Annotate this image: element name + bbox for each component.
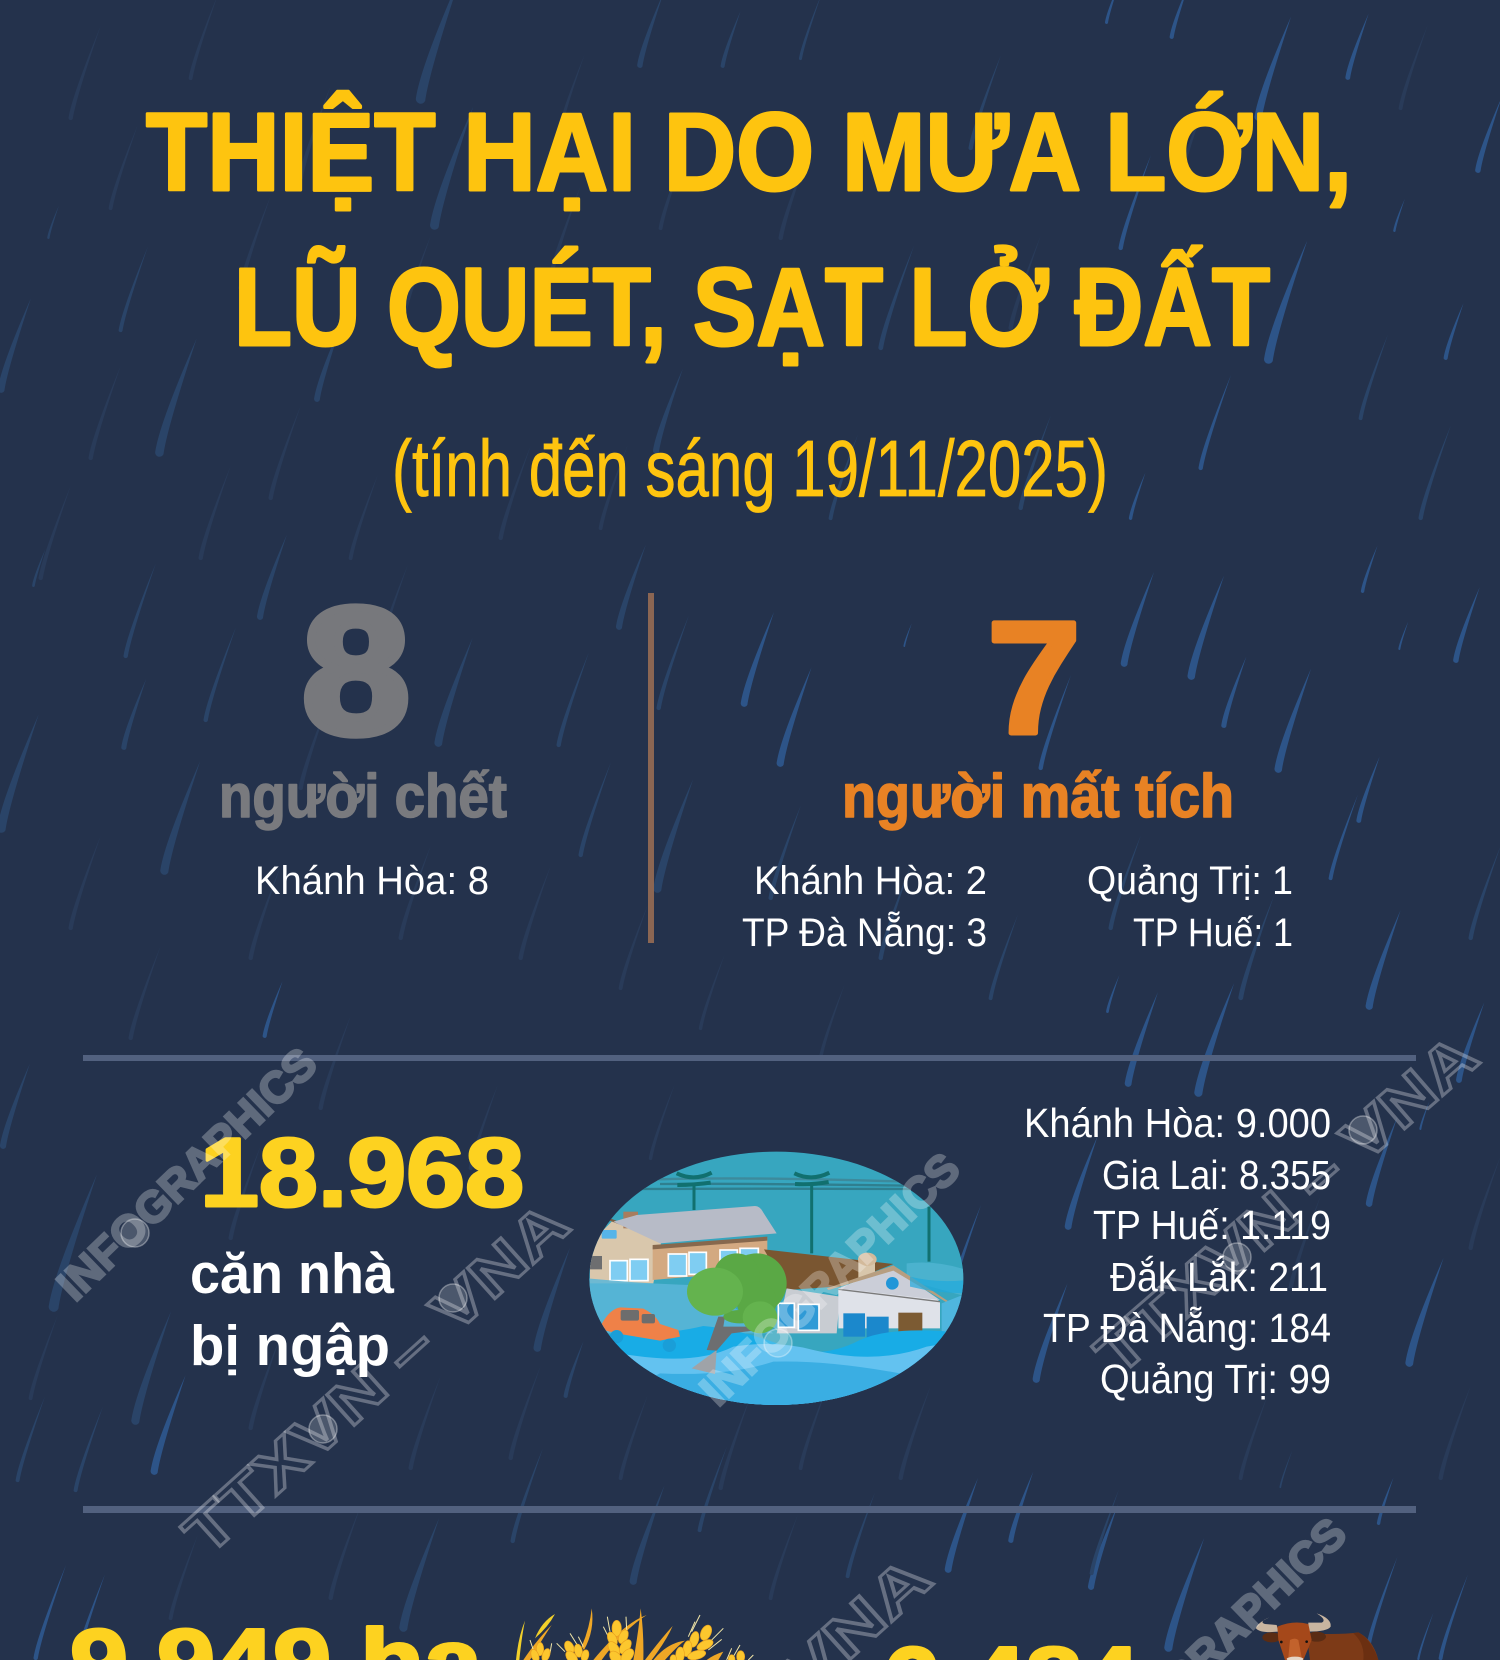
vertical divider [648, 593, 654, 943]
province breakdown: missing [742, 859, 1293, 955]
panel: deaths [219, 571, 507, 903]
watermarks: TTXVN – VNA [171, 1189, 581, 1568]
label: flooded houses: căn nhà [190, 1242, 394, 1306]
title [146, 91, 1352, 369]
province breakdown: houses: TP Huế: 1.119 [1093, 1202, 1331, 1248]
water [910, 1277, 967, 1293]
province breakdown: houses [1024, 1100, 1331, 1402]
back water [587, 1278, 773, 1333]
panel: livestock [883, 1613, 1378, 1660]
panel: crops [70, 1608, 753, 1660]
label: missing: người mất tích [842, 762, 1234, 830]
power lines [640, 1173, 929, 1262]
title: LŨ QUÉT, SẠT LỞ ĐẤT [234, 246, 1270, 369]
left houses [590, 1220, 662, 1283]
number: 8 dead: 8 [302, 571, 410, 772]
number: 7 missing: 7 [987, 588, 1081, 767]
title: THIỆT HẠI DO MƯA LỚN, [146, 91, 1352, 214]
number: flooded houses: 18.968 [200, 1118, 524, 1227]
subtitle: date: (tính đến sáng 19/11/2025) [392, 424, 1108, 513]
watermarks: INFOGRAPHICS [48, 1039, 327, 1310]
province breakdown: houses: Đắk Lắk: 211 [1110, 1254, 1328, 1300]
watermarks: TTXVN – VNA [1083, 1021, 1490, 1388]
right house [764, 1249, 893, 1290]
province breakdown: missing: Khánh Hòa: 2 [754, 859, 987, 903]
province breakdown: dead: Khánh Hòa: 8 [255, 859, 489, 903]
car [602, 1307, 680, 1341]
province breakdown: houses: Gia Lai: 8.355 [1102, 1152, 1331, 1198]
province breakdown: houses: Khánh Hòa: 9.000 [1024, 1100, 1331, 1146]
province breakdown: missing: TP Huế: 1 [1133, 911, 1293, 955]
watermarks: INFOGRAPHICS [691, 1144, 970, 1415]
label: flooded houses: bị ngập [190, 1314, 390, 1378]
tree [692, 1350, 717, 1374]
province breakdown: houses: TP Đà Nẵng: 184 [1043, 1305, 1331, 1351]
label: dead: người chết [219, 762, 507, 830]
watermarks [48, 1021, 1490, 1660]
province breakdown: missing: Quảng Trị: 1 [1087, 859, 1293, 903]
panel: missing [742, 588, 1293, 955]
panel: flooded houses [190, 1100, 1331, 1410]
icon: rice sheaf [516, 1608, 753, 1660]
icon: flooded neighbourhood illustration [587, 1150, 967, 1410]
province breakdown: missing: TP Đà Nẵng: 3 [742, 910, 987, 955]
label: flooded houses [190, 1242, 394, 1378]
province breakdown: houses: Quảng Trị: 99 [1100, 1356, 1331, 1402]
icon: buffalo [1256, 1613, 1378, 1660]
